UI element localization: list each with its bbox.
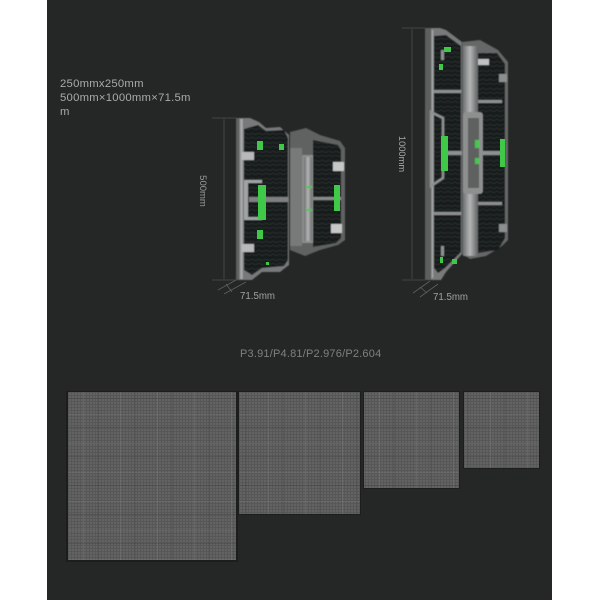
dimension: 1000mm height xyxy=(397,28,425,280)
product: 1000mm cabinet xyxy=(397,28,508,303)
dimension: 71.5mm depth xyxy=(413,281,468,303)
right module xyxy=(462,40,508,259)
dimension: 71.5mm depth: 71.5mm xyxy=(240,291,275,302)
left module xyxy=(425,28,463,280)
dimension: 71.5mm depth xyxy=(218,280,275,302)
dimension: 1000mm height: 1000mm xyxy=(397,136,407,172)
green handles left module xyxy=(439,47,457,264)
green handle right module xyxy=(500,139,505,167)
text block: cabinet sizes: 250mmx250mm xyxy=(60,78,144,90)
silver centre handle xyxy=(463,46,483,256)
heading: pixel pitch list: P3.91/P4.81/P2.976/P2.604 xyxy=(240,348,381,360)
left module xyxy=(236,118,289,280)
text block: cabinet sizes xyxy=(60,78,191,118)
green handle right module xyxy=(334,185,340,211)
LED module: P2.604 xyxy=(463,391,540,469)
LED module: P3.91 xyxy=(66,391,238,562)
text block: cabinet sizes: 500mm×1000mm×71.5m xyxy=(60,92,191,104)
LED module: P4.81 xyxy=(238,391,361,515)
text block: cabinet sizes: m xyxy=(60,106,70,118)
silver centre handle xyxy=(302,155,313,243)
right module xyxy=(290,128,345,256)
product: 500mm cabinet xyxy=(197,118,345,302)
dimension: 500mm height: 500mm xyxy=(197,175,208,207)
dimension: 500mm height xyxy=(197,118,236,280)
LED module: P2.976 xyxy=(363,391,460,489)
dimension: 71.5mm depth: 71.5mm xyxy=(433,292,468,303)
green handles left module xyxy=(257,141,284,265)
